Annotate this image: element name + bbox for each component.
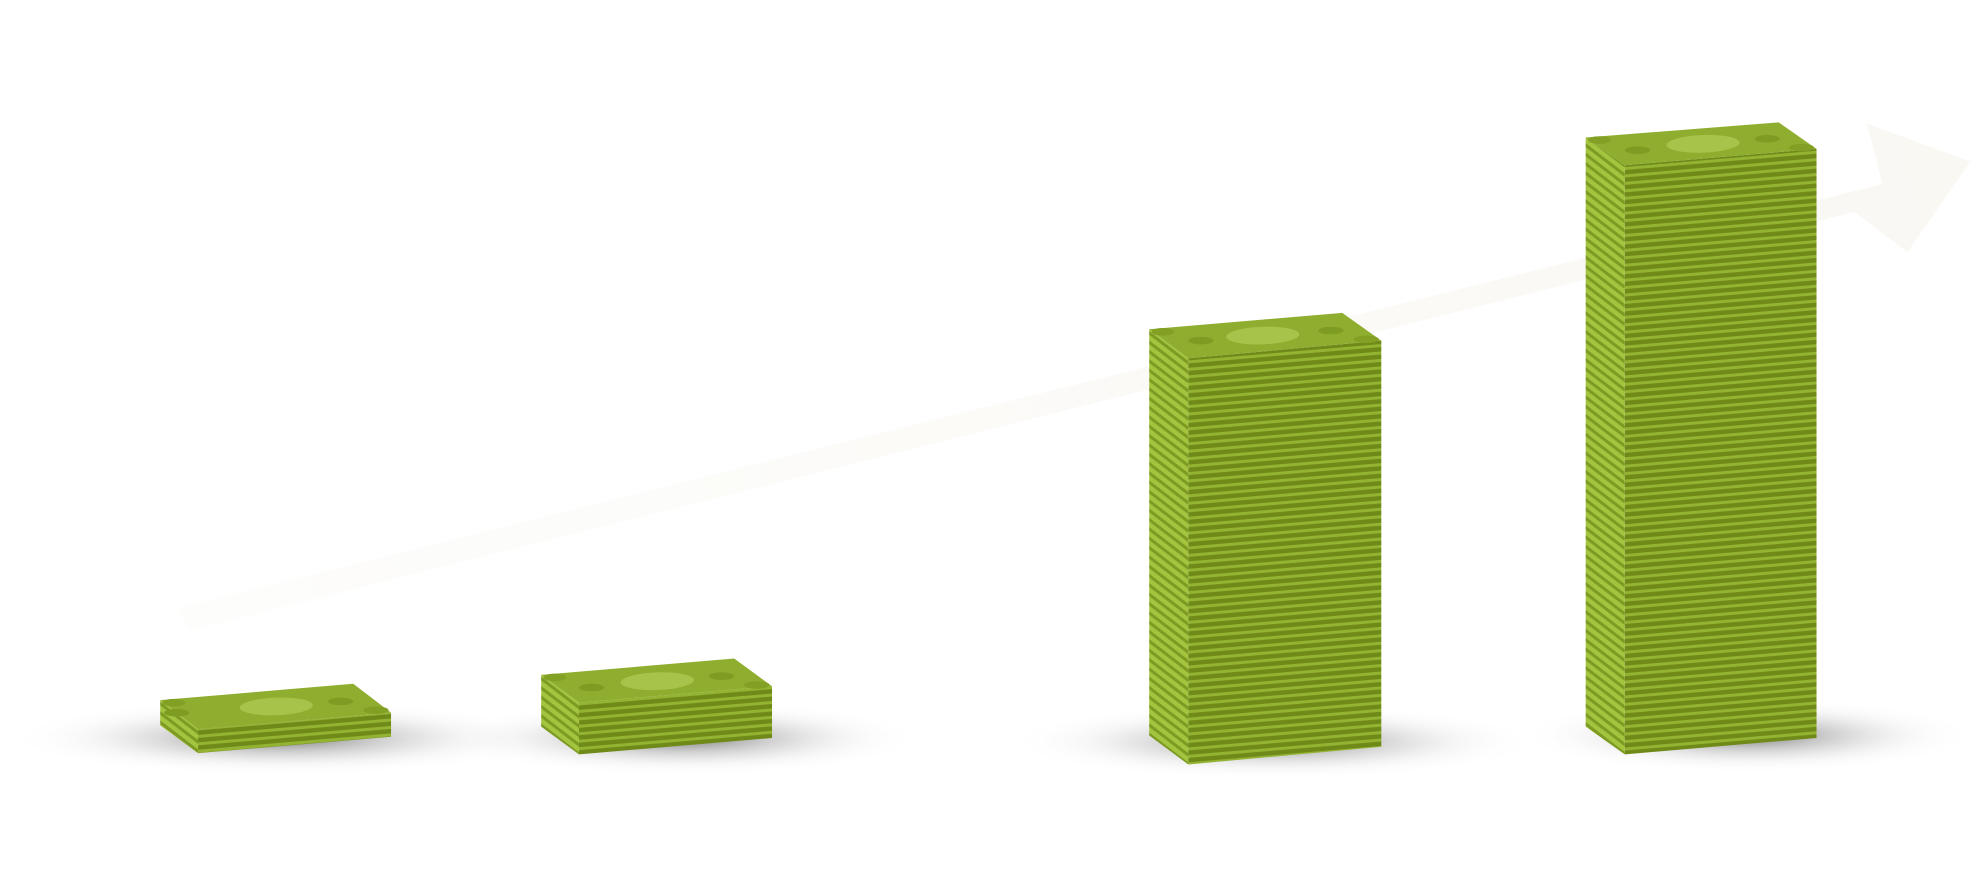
stack 1 (smallest) [160,684,391,753]
shadow: stack 3 [1009,704,1539,780]
stack 2 [541,658,772,754]
arrow: faint growth arrow [177,124,1970,631]
stack 4 (largest) [1586,122,1817,754]
stack 3 [1149,313,1381,764]
shadow: stack 1 [9,700,551,776]
shadow: stack 2 [442,700,921,776]
shadow: stack 4 [1520,698,1974,773]
